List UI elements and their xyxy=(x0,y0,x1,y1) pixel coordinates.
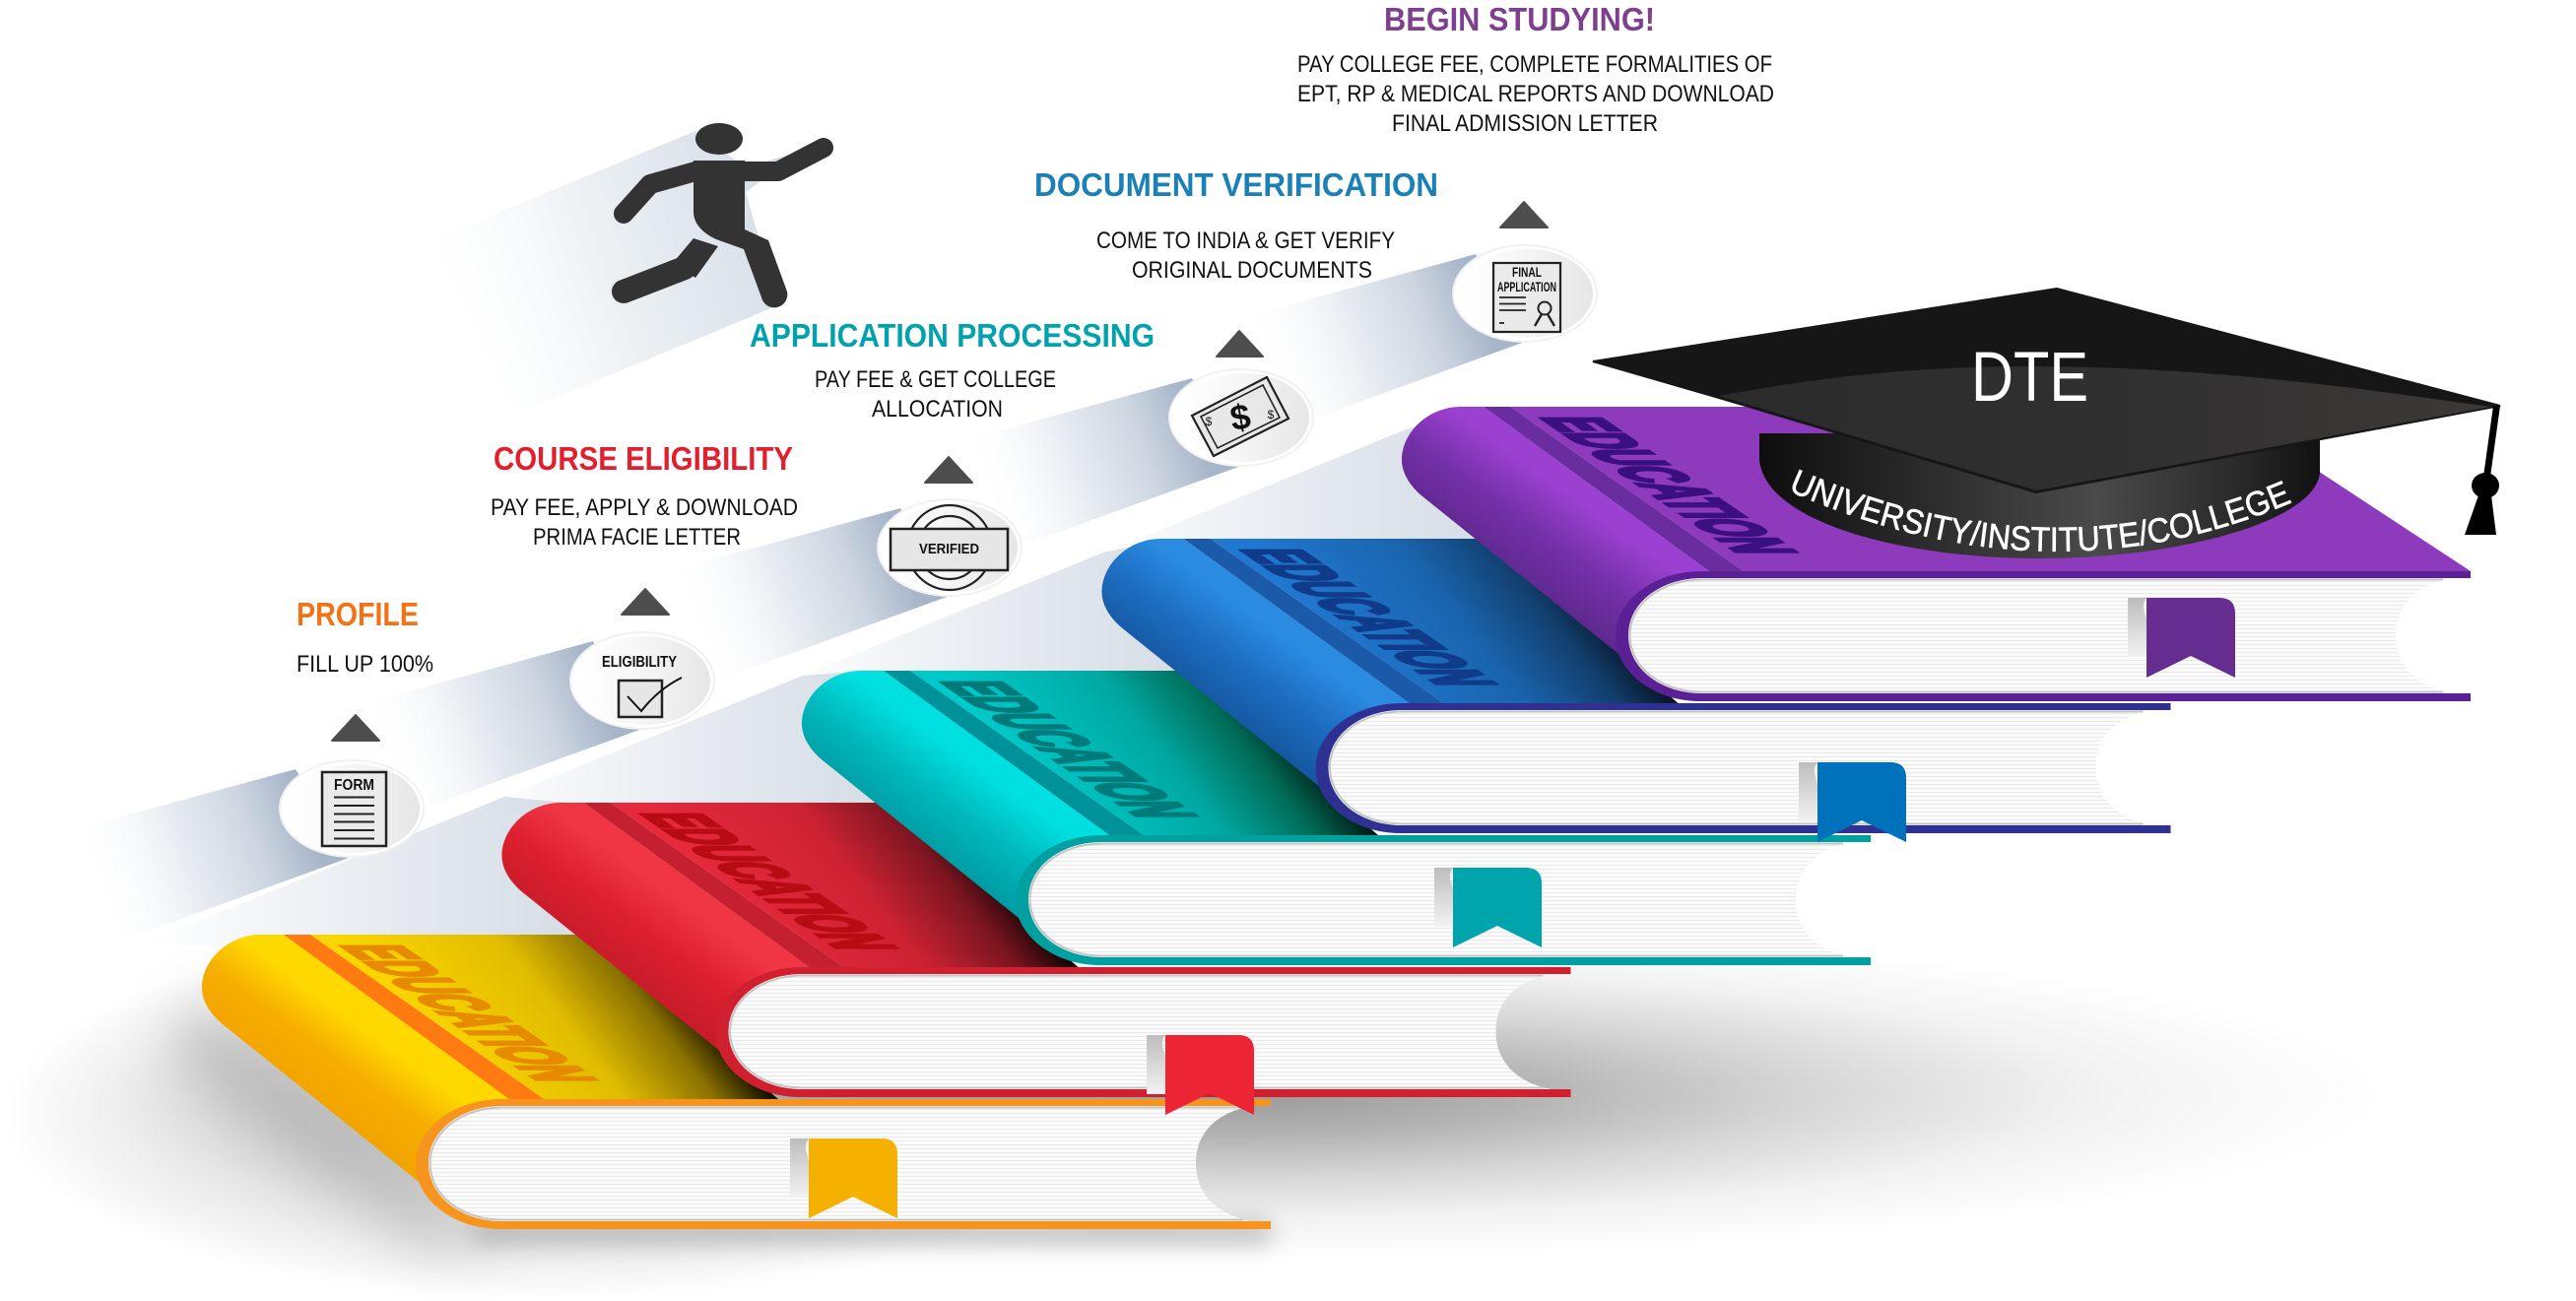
text: begin studying: EPT, RP & MEDICAL REPORTS AND DOWNLOAD xyxy=(1297,81,1774,107)
book 1: yellow xyxy=(202,935,1271,1229)
bookmark xyxy=(1434,868,1542,947)
tassel xyxy=(2465,406,2500,535)
book 4: blue xyxy=(1101,539,2171,842)
step 4: dollar icon: $ xyxy=(1206,415,1213,428)
heading: document verification: DOCUMENT VERIFICATION xyxy=(1034,166,1438,203)
icon: running person xyxy=(624,123,824,307)
step 1: form icon xyxy=(280,760,424,857)
text: course eligibility xyxy=(491,494,798,551)
graduation cap xyxy=(1592,288,2500,558)
book 2: red xyxy=(502,803,1570,1115)
cap title: DTE xyxy=(1971,339,2088,417)
step 1: form icon: FORM xyxy=(334,777,374,794)
arrow: step 2 xyxy=(622,589,669,615)
text: document verification: COME TO INDIA & GET VERIFY xyxy=(1096,228,1395,254)
bookmark xyxy=(1147,1035,1254,1115)
text: begin studying xyxy=(1297,51,1774,137)
text: course eligibility: PAY FEE, APPLY & DOWNLOAD xyxy=(491,494,798,521)
bookmark xyxy=(1799,762,1906,842)
spine text: EDUCATION xyxy=(1221,549,1515,685)
runner motion shadow xyxy=(433,131,805,414)
text: begin studying: PAY COLLEGE FEE, COMPLETE FORMALITIES OF xyxy=(1297,51,1772,78)
heading: begin studying: BEGIN STUDYING! xyxy=(1384,1,1655,37)
cap band text: UNIVERSITY/INSTITUTE/COLLEGE xyxy=(1793,469,2291,552)
icon shadow bands xyxy=(0,254,1525,975)
bookmark xyxy=(790,1138,897,1218)
road shadows behind the steps xyxy=(148,409,1532,945)
step 5: final application icon xyxy=(1453,245,1597,342)
step 3: verified icon xyxy=(878,499,1022,596)
text: application processing xyxy=(815,366,1056,423)
arrow: step 1 xyxy=(332,715,379,741)
arrow: step 5 xyxy=(1500,202,1548,228)
step 2: eligibility icon: ELIGIBILITY xyxy=(602,654,677,671)
bookmark xyxy=(2128,598,2235,678)
text: course eligibility: PRIMA FACIE LETTER xyxy=(533,524,741,551)
step 5: final application icon: APPLICATION xyxy=(1497,279,1556,294)
book 5: purple xyxy=(1402,407,2471,701)
heading: application processing: APPLICATION PROCESSING xyxy=(750,317,1155,354)
step 4: dollar icon: $ xyxy=(1227,396,1254,438)
ground shadow xyxy=(0,926,2384,1300)
text: document verification xyxy=(1096,228,1395,284)
spine text: EDUCATION xyxy=(921,681,1215,817)
text: begin studying: FINAL ADMISSION LETTER xyxy=(1392,110,1658,137)
spine text: EDUCATION xyxy=(321,944,615,1081)
book 3: teal xyxy=(802,671,1871,965)
step 4: dollar icon xyxy=(1169,369,1313,466)
text: application processing: ALLOCATION xyxy=(872,396,1003,423)
heading: profile: PROFILE xyxy=(297,596,419,632)
spine text: EDUCATION xyxy=(1521,417,1815,553)
step 3: verified icon: VERIFIED xyxy=(919,541,979,557)
text: application processing: PAY FEE & GET COLLEGE xyxy=(815,366,1056,393)
arrow: step 3 xyxy=(925,457,972,483)
step 5: final application icon: FINAL xyxy=(1512,264,1542,280)
heading: course eligibility: COURSE ELIGIBILITY xyxy=(494,440,793,477)
step 4: dollar icon: $ xyxy=(1268,408,1275,422)
text: document verification: ORIGINAL DOCUMENTS xyxy=(1132,257,1372,284)
step 2: eligibility icon xyxy=(570,632,714,729)
arrow: step 4 xyxy=(1217,331,1263,357)
text: profile: FILL UP 100% xyxy=(297,651,433,678)
spine text: EDUCATION xyxy=(621,813,915,949)
